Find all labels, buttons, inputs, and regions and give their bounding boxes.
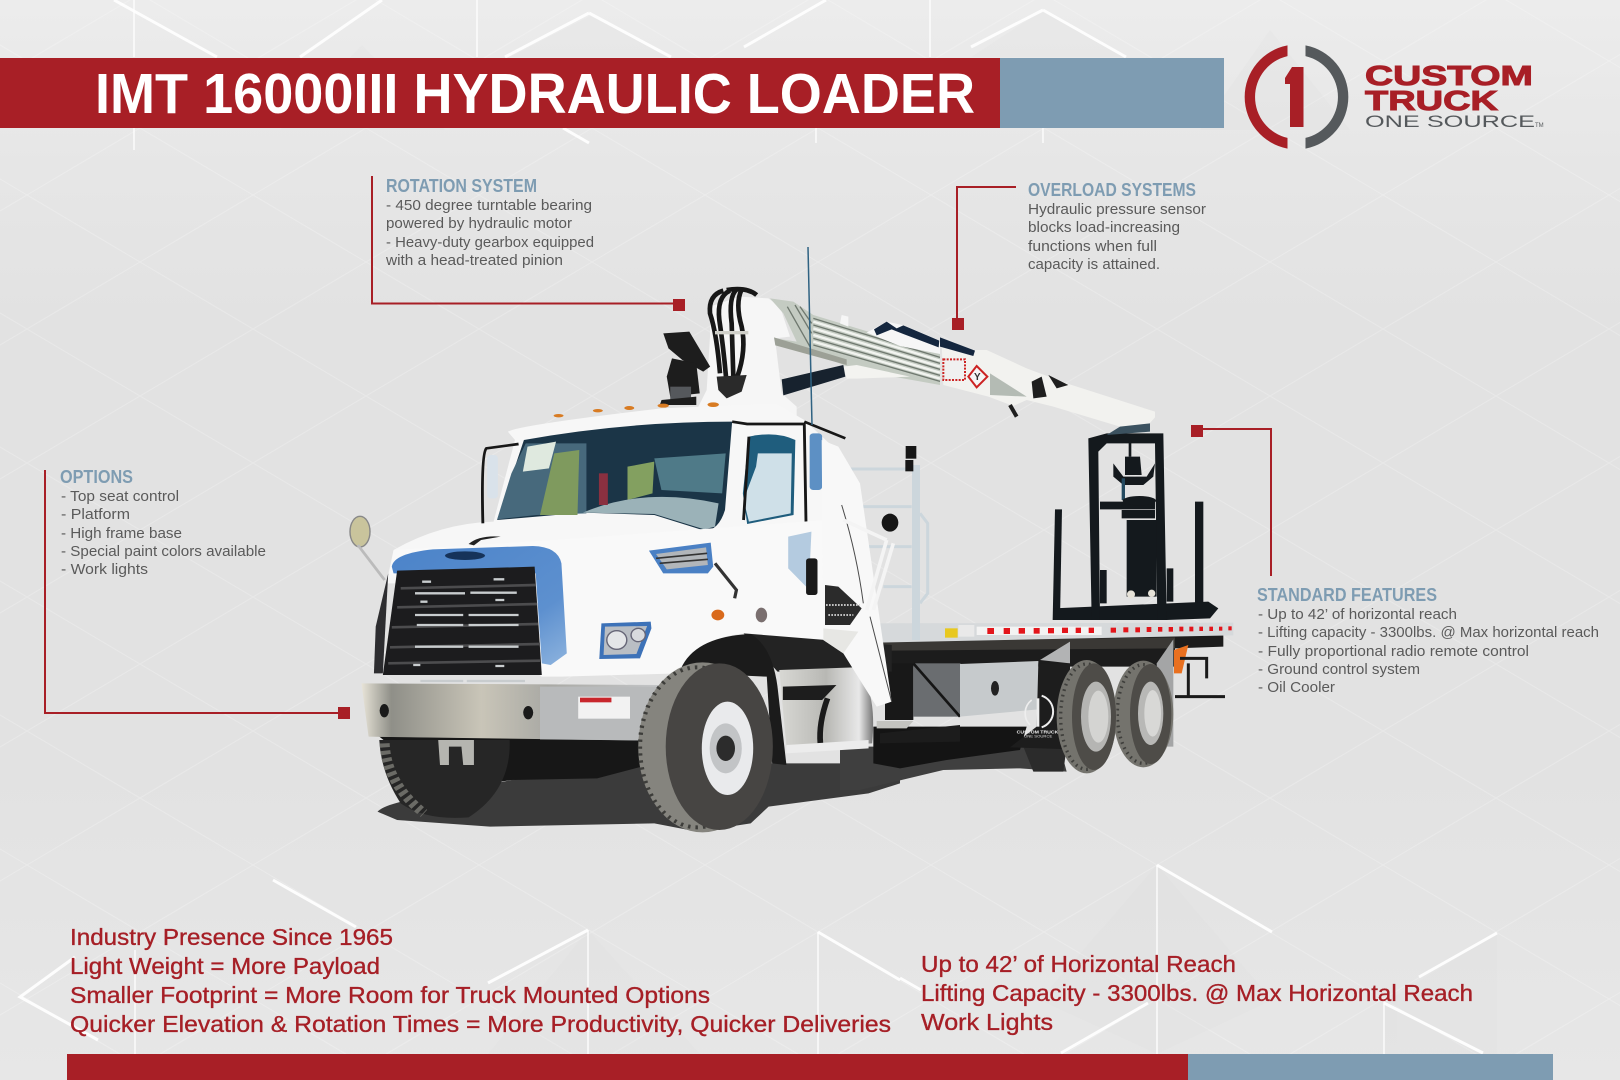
overload text: functions when full xyxy=(1028,239,1157,255)
left tyre tread xyxy=(385,743,424,813)
standard text: - Oil Cooler xyxy=(1258,680,1335,696)
rotation text: with a head-treated pinion xyxy=(385,253,563,269)
grille xyxy=(383,567,542,681)
options text: - High frame base xyxy=(61,526,182,542)
logo wordmark: ONE SOURCE xyxy=(1365,112,1535,131)
hydraulic block xyxy=(823,628,858,653)
standard text: STANDARD FEATURES xyxy=(1257,585,1437,605)
rack work light xyxy=(905,446,916,471)
right mirror xyxy=(810,433,822,490)
convex mirror xyxy=(350,516,370,547)
grille side lamp xyxy=(374,573,388,673)
boom head xyxy=(1107,423,1150,435)
options text xyxy=(60,467,266,578)
flat bed xyxy=(875,623,1233,643)
rear hitch xyxy=(1174,645,1225,697)
benefits list left xyxy=(70,924,891,1037)
grapple rollers xyxy=(1127,590,1155,598)
under cab frame xyxy=(744,633,892,672)
logo: Custom Truck One Source xyxy=(1245,45,1544,149)
seat mechanism xyxy=(660,332,710,405)
logo wordmark: TRUCK xyxy=(1365,85,1498,116)
windshield xyxy=(497,422,732,531)
cab side window xyxy=(743,434,795,524)
callout: overload systems xyxy=(952,180,1206,330)
standard text: - Lifting capacity - 3300lbs. @ Max horizontal reach xyxy=(1258,625,1599,641)
options text: OPTIONS xyxy=(60,467,133,487)
mirrors and frames xyxy=(482,422,845,544)
inner boom lattice xyxy=(770,298,940,385)
rear wheels xyxy=(1057,660,1173,773)
work lamp xyxy=(882,514,898,532)
truck illustration xyxy=(350,247,1233,832)
cab rear and ladder rack xyxy=(822,440,960,743)
callout: options xyxy=(45,467,350,719)
rack struts xyxy=(843,520,893,610)
mud flap with logo xyxy=(1010,663,1071,749)
overload text: Hydraulic pressure sensor xyxy=(1028,202,1206,218)
logo wordmark: CUSTOM xyxy=(1365,60,1533,91)
ground shadow xyxy=(377,747,1067,832)
wheel arch xyxy=(679,634,786,765)
overload text: capacity is attained. xyxy=(1028,257,1160,273)
mirror arm xyxy=(358,545,385,580)
rotation text: ROTATION SYSTEM xyxy=(386,176,537,196)
crane mast xyxy=(697,297,797,417)
boom joint xyxy=(1032,375,1068,398)
IMT decal: Y xyxy=(974,372,981,383)
hood latch xyxy=(469,536,501,545)
hood vent xyxy=(649,543,713,573)
marker lamp xyxy=(711,610,724,620)
benefits list right: Work Lights xyxy=(921,1009,1053,1035)
IMT decal xyxy=(943,359,987,387)
rear of truck xyxy=(873,433,1233,773)
rotation text: - Heavy-duty gearbox equipped xyxy=(386,235,594,251)
hood and grille xyxy=(361,520,892,832)
options text: - Platform xyxy=(61,507,130,523)
options leader line xyxy=(45,470,350,719)
callout: rotation system xyxy=(372,176,685,311)
antenna xyxy=(808,247,812,425)
outer boom xyxy=(940,337,1155,435)
standard text: - Up to 42’ of horizontal reach xyxy=(1258,607,1457,623)
logo ring xyxy=(1245,45,1348,149)
benefits list left: Smaller Footprint = More Room for Truck Mounted Options xyxy=(70,982,710,1008)
door reflection xyxy=(788,532,811,587)
lift cylinder xyxy=(782,365,845,395)
benefits list right xyxy=(921,951,1473,1035)
overload text: OVERLOAD SYSTEMS xyxy=(1028,180,1196,200)
options text: - Top seat control xyxy=(61,489,179,505)
grate lines xyxy=(826,605,860,615)
options text: - Special paint colors available xyxy=(61,544,266,560)
boom section lattice xyxy=(990,373,1027,397)
options text: - Work lights xyxy=(61,562,148,578)
header band xyxy=(0,58,1224,128)
logo wordmark xyxy=(1365,60,1544,131)
hood crease xyxy=(715,563,736,598)
fuel tank xyxy=(779,667,873,753)
benefits list right: Up to 42’ of Horizontal Reach xyxy=(921,951,1236,977)
benefits list left: Light Weight = More Payload xyxy=(70,953,380,979)
standard text: - Ground control system xyxy=(1258,662,1420,678)
standard text: - Fully proportional radio remote control xyxy=(1258,644,1529,660)
tow hook xyxy=(438,740,474,765)
cab upper xyxy=(350,402,845,583)
standard leader line xyxy=(1191,425,1271,576)
bumper xyxy=(361,683,661,741)
storage box xyxy=(885,661,1038,720)
cab rear column xyxy=(822,440,892,707)
emblem xyxy=(445,551,485,560)
header red bar xyxy=(0,58,1000,128)
grille surround xyxy=(392,546,567,665)
rotation text: powered by hydraulic motor xyxy=(386,216,572,232)
rotation text xyxy=(385,176,594,269)
overload text: blocks load-increasing xyxy=(1028,220,1180,236)
left cab mirror xyxy=(487,455,498,498)
mud flap with logo: CUSTOM TRUCK xyxy=(1017,729,1059,734)
door handle xyxy=(806,558,817,595)
left front tyre xyxy=(379,740,510,818)
frame underside xyxy=(873,635,1223,772)
overload text xyxy=(1028,180,1206,273)
wiring grate xyxy=(825,585,862,625)
cab badge xyxy=(756,608,767,622)
rotation text: - 450 degree turntable bearing xyxy=(386,198,592,214)
header blue bar xyxy=(1000,58,1224,128)
callout: standard features xyxy=(1191,425,1599,696)
swivel base xyxy=(717,375,747,398)
mud flap with logo: ONE SOURCE xyxy=(1024,735,1053,739)
headlight xyxy=(599,622,651,659)
benefits list right: Lifting Capacity - 3300lbs. @ Max Horizontal Reach xyxy=(921,980,1473,1006)
cab and hood xyxy=(350,402,960,832)
ladder rack xyxy=(850,465,928,640)
loader crane xyxy=(660,289,940,417)
rotation leader line xyxy=(372,176,685,311)
footer bar xyxy=(67,1054,1553,1080)
roof marker lights xyxy=(554,402,719,417)
chassis dark xyxy=(379,737,658,790)
hose clamp xyxy=(715,328,748,338)
logo wordmark: TM xyxy=(1535,123,1544,129)
cab steps xyxy=(877,721,960,743)
overload leader line xyxy=(952,187,1016,330)
column edge xyxy=(842,505,892,702)
boom top cylinder xyxy=(940,337,975,356)
standard text xyxy=(1257,585,1599,696)
benefits list left: Industry Presence Since 1965 xyxy=(70,924,393,950)
stowed jib and stakes xyxy=(1053,433,1218,620)
front drive tyre xyxy=(638,662,773,832)
benefits list left: Quicker Elevation & Rotation Times = More Productivity, Quicker Deliveries xyxy=(70,1011,891,1037)
hydraulic hoses xyxy=(710,289,757,377)
title: IMT 16000III HYDRAULIC LOADER xyxy=(95,62,975,126)
